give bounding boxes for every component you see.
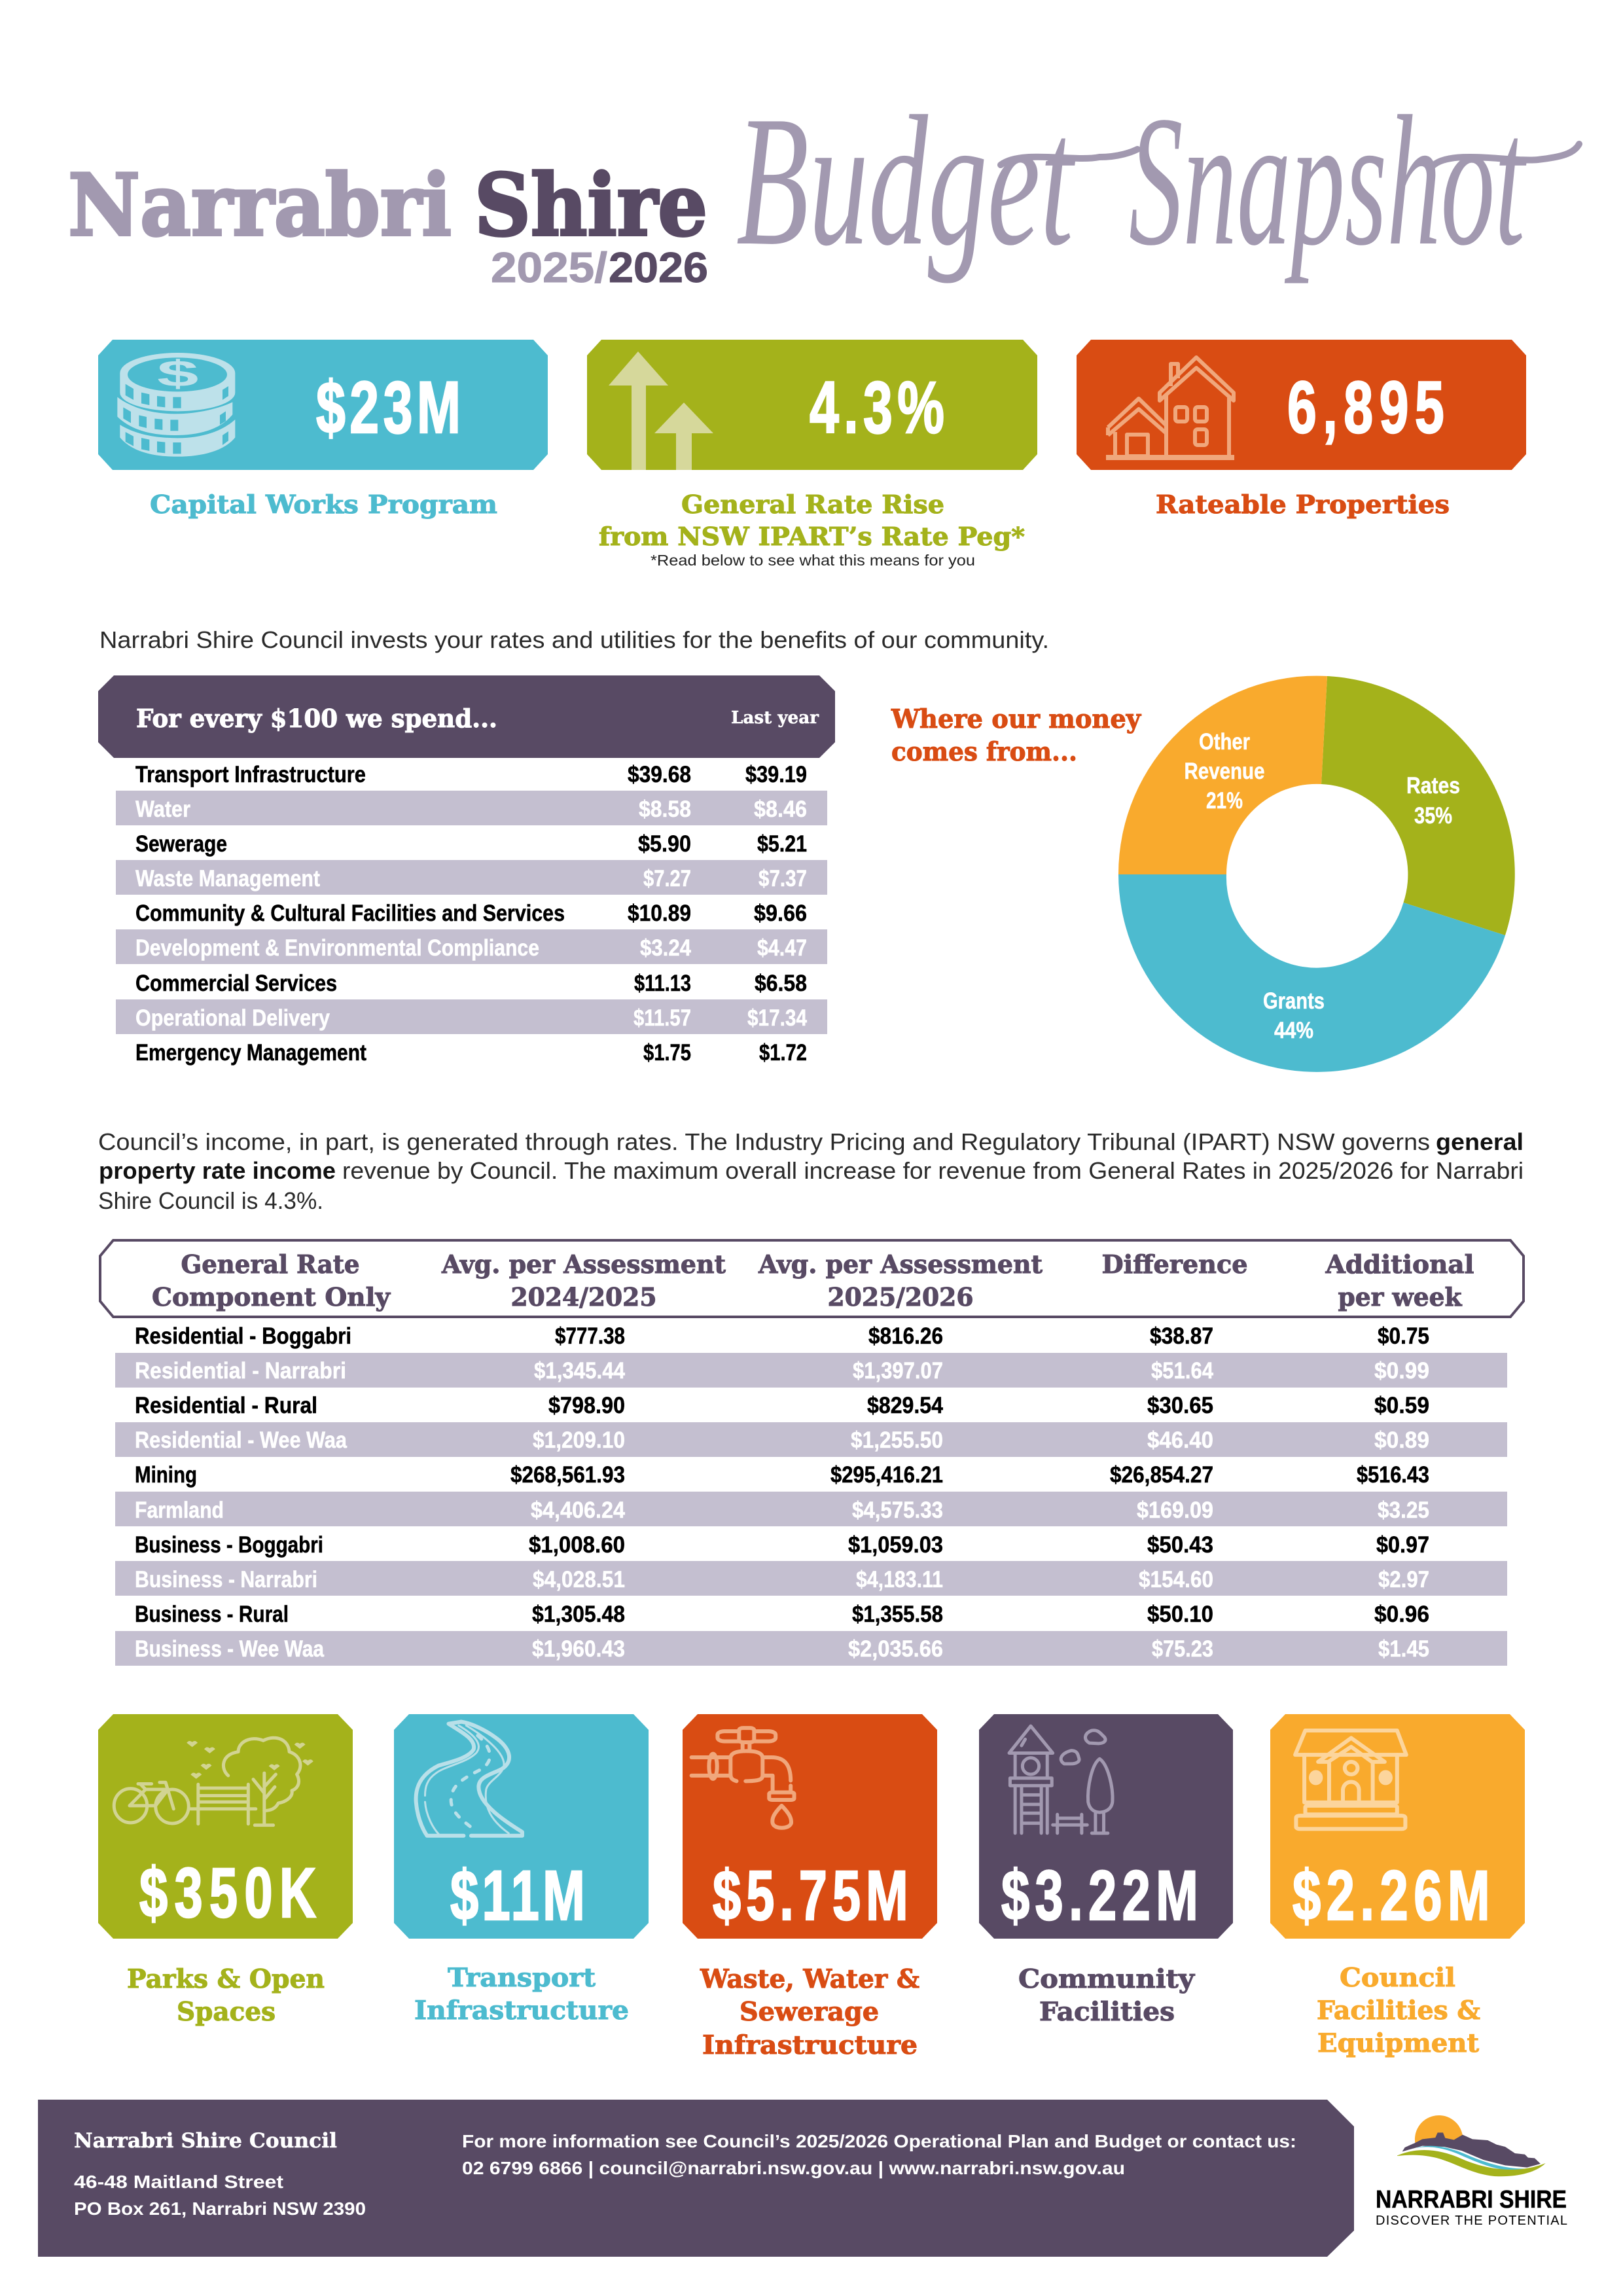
table rows: $46.40 <box>1147 1427 1213 1453</box>
table rows: $75.23 <box>1152 1636 1213 1662</box>
heading: where our money comes from: Where our money <box>891 704 1141 734</box>
panel: footer <box>38 2100 1354 2257</box>
caption: Community <box>1018 1964 1195 1994</box>
title: 2025/ <box>491 243 607 291</box>
paragraph: rates explanation: Council’s income, in part, is generated through rates. The Industry Pricing and Regulatory Tribunal (IPART) NSW governs <box>98 1128 1430 1155</box>
caption: from NSW IPART’s Rate Peg* <box>599 522 1025 551</box>
caption: Transport <box>448 1963 596 1993</box>
logo: NARRABRI SHIRE <box>1376 2186 1567 2214</box>
donut chart: Grants <box>1263 988 1325 1014</box>
title <box>68 155 708 291</box>
icon: road <box>416 1722 522 1836</box>
table rows: $30.65 <box>1147 1393 1213 1418</box>
table rows: $9.66 <box>754 901 807 926</box>
icon: park <box>114 1738 313 1825</box>
footer address <box>74 2129 366 2219</box>
paragraph: rates explanation <box>98 1128 1524 1214</box>
footer address: Narrabri Shire Council <box>74 2129 337 2153</box>
paragraph: rates explanation: general <box>1436 1128 1524 1155</box>
donut chart: Revenue <box>1185 759 1264 784</box>
table rows: $0.89 <box>1374 1427 1429 1453</box>
panel: transport <box>394 1714 649 2026</box>
table rows: $295,416.21 <box>830 1462 943 1488</box>
caption: Infrastructure <box>702 2030 918 2060</box>
table rows: $169.09 <box>1137 1498 1213 1523</box>
caption: Waste, Water & <box>700 1964 919 1994</box>
table rows: $0.75 <box>1378 1323 1429 1349</box>
table rows: $11.13 <box>634 971 691 996</box>
icon: playground <box>1009 1726 1113 1833</box>
table rows: $154.60 <box>1139 1567 1213 1592</box>
footer address: PO Box 261, Narrabri NSW 2390 <box>74 2198 366 2219</box>
table rows: $0.59 <box>1374 1393 1429 1418</box>
table rows: $1,960.43 <box>532 1636 625 1662</box>
caption: General Rate Rise <box>681 490 944 519</box>
caption <box>414 1963 629 2026</box>
table rows: Residential - Narrabri <box>135 1358 346 1384</box>
value: $23M <box>316 367 461 448</box>
table rows: $8.46 <box>754 797 807 822</box>
caption: Facilities <box>1039 1997 1175 2027</box>
table rows: $516.43 <box>1357 1462 1429 1488</box>
panel: parks <box>98 1714 353 2027</box>
table rows: $51.64 <box>1151 1358 1213 1384</box>
table header: Difference <box>1102 1249 1247 1279</box>
script title: Budget Snapshot: Budget <box>736 77 1077 284</box>
caption <box>127 1964 325 2027</box>
table rows <box>135 762 807 1066</box>
table rows: $0.97 <box>1376 1532 1429 1558</box>
table rows: $39.19 <box>745 762 807 787</box>
table rows: Transport Infrastructure <box>135 762 366 787</box>
table rows: $1,355.58 <box>852 1602 943 1627</box>
table rows: Development & Environmental Compliance <box>135 935 539 961</box>
table rows: $1,255.50 <box>851 1427 943 1453</box>
table rows: Operational Delivery <box>135 1005 330 1031</box>
table rows: $798.90 <box>548 1393 625 1418</box>
table rows: Business - Narrabri <box>135 1567 317 1592</box>
table rows: $3.25 <box>1378 1498 1429 1523</box>
table rows <box>135 1323 1429 1662</box>
donut chart: 44% <box>1274 1018 1313 1043</box>
icon: tap <box>692 1728 794 1828</box>
table rows: $7.37 <box>758 866 807 891</box>
table rows: $0.96 <box>1374 1602 1429 1627</box>
table rows: $50.10 <box>1147 1602 1213 1627</box>
icon: coins <box>117 353 235 457</box>
table header <box>100 1240 1524 1317</box>
value: $3.22M <box>1001 1856 1198 1935</box>
table rows: $1,008.60 <box>529 1532 625 1558</box>
value: $5.75M <box>713 1856 908 1935</box>
table rows: $4,028.51 <box>533 1567 625 1592</box>
caption <box>1317 1963 1480 2058</box>
table header: For every $100 we spend... <box>136 704 497 733</box>
table rows: Mining <box>135 1462 197 1488</box>
caption <box>1018 1964 1195 2027</box>
caption: Facilities & <box>1317 1996 1480 2026</box>
donut chart: 21% <box>1206 788 1243 814</box>
icon: arrows <box>609 351 713 470</box>
value: 6,895 <box>1287 367 1444 448</box>
logo: DISCOVER THE POTENTIAL <box>1376 2214 1567 2228</box>
caption: Rateable Properties <box>1156 490 1450 519</box>
table rows: $1,345.44 <box>534 1358 625 1384</box>
caption: Parks & Open <box>127 1964 325 1994</box>
caption <box>700 1964 919 2060</box>
caption: *Read below to see what this means for you <box>651 552 975 569</box>
panel: waste water sewerage <box>683 1714 937 2060</box>
title: Shire <box>474 155 707 255</box>
icon: coins: $ <box>157 353 198 395</box>
intro text: Narrabri Shire Council invests your rates and utilities for the benefits of our community. <box>99 626 1049 653</box>
table rows: Residential - Wee Waa <box>135 1427 347 1453</box>
caption: Equipment <box>1317 2028 1479 2058</box>
table rows: $1.72 <box>759 1040 807 1066</box>
table rows: $10.89 <box>628 901 691 926</box>
table rows: $3.24 <box>640 935 691 961</box>
table rows: Farmland <box>135 1498 224 1523</box>
table header: Avg. per Assessment <box>758 1249 1043 1279</box>
value: $2.26M <box>1293 1856 1490 1935</box>
table rows: $5.21 <box>757 831 807 857</box>
logo <box>1376 2115 1567 2228</box>
table rows: $4,575.33 <box>852 1498 943 1523</box>
table rows: $816.26 <box>868 1323 943 1349</box>
footer contact <box>462 2131 1296 2178</box>
footer contact: 02 6799 6866 | council@narrabri.nsw.gov.au | www.narrabri.nsw.gov.au <box>462 2158 1125 2178</box>
table rows: $39.68 <box>628 762 691 787</box>
table rows: $268,561.93 <box>510 1462 625 1488</box>
table rows: $4,406.24 <box>531 1498 625 1523</box>
table rows: $26,854.27 <box>1110 1462 1213 1488</box>
icon: building <box>1295 1731 1406 1829</box>
paragraph: rates explanation: property rate income <box>99 1157 336 1184</box>
table header: Component Only <box>152 1282 391 1312</box>
panel: community facilities <box>979 1714 1233 2027</box>
panel: rateable properties <box>1077 340 1526 519</box>
donut chart: Other <box>1199 729 1250 755</box>
caption: Infrastructure <box>414 1996 629 2026</box>
donut chart: 35% <box>1414 803 1452 829</box>
table rows: $17.34 <box>747 1005 807 1031</box>
table rows: $1,059.03 <box>848 1532 943 1558</box>
table rows: $0.99 <box>1374 1358 1429 1384</box>
value: $350K <box>139 1853 316 1932</box>
table rows: Waste Management <box>135 866 320 891</box>
donut chart <box>1118 676 1515 1072</box>
table rows: Business - Wee Waa <box>135 1636 324 1662</box>
table header: per week <box>1338 1282 1462 1312</box>
caption: Sewerage <box>740 1997 879 2027</box>
table rows: Community & Cultural Facilities and Services <box>135 901 565 926</box>
heading: where our money comes from: comes from... <box>891 737 1077 767</box>
table rows: $4.47 <box>757 935 807 961</box>
table header <box>98 675 835 758</box>
title: 2026 <box>609 243 708 291</box>
table header: Additional <box>1325 1249 1474 1279</box>
table rows: $50.43 <box>1147 1532 1213 1558</box>
table rows: Sewerage <box>135 831 227 857</box>
caption: Council <box>1340 1963 1455 1993</box>
value: $11M <box>450 1856 585 1935</box>
table rows: Residential - Boggabri <box>135 1323 351 1349</box>
paragraph: rates explanation: revenue by Council. The maximum overall increase for revenue from General Rates in 2025/2026 for Narrabri <box>342 1157 1524 1184</box>
table rows: Business - Boggabri <box>135 1532 323 1558</box>
table header: Last year <box>731 708 819 728</box>
table header: 2024/2025 <box>510 1282 657 1312</box>
table rows: $1.45 <box>1378 1636 1429 1662</box>
caption: Spaces <box>177 1997 276 2027</box>
paragraph: rates explanation: Shire Council is 4.3%. <box>98 1187 323 1214</box>
donut chart: Rates <box>1406 773 1460 798</box>
table rows: $4,183.11 <box>856 1567 943 1592</box>
table rows: $2.97 <box>1378 1567 1429 1592</box>
table rows: $1.75 <box>643 1040 691 1066</box>
table rows: $8.58 <box>639 797 691 822</box>
panel: rate table <box>100 1240 1524 1666</box>
table rows: Water <box>135 797 190 822</box>
table rows: $829.54 <box>867 1393 943 1418</box>
table rows: $1,397.07 <box>853 1358 943 1384</box>
panel: general rate rise <box>587 340 1037 569</box>
table rows: Business - Rural <box>135 1602 289 1627</box>
table rows: Emergency Management <box>135 1040 366 1066</box>
table rows: $1,305.48 <box>532 1602 625 1627</box>
table header: Avg. per Assessment <box>441 1249 726 1279</box>
footer contact: For more information see Council’s 2025/2026 Operational Plan and Budget or contact us: <box>462 2131 1296 2151</box>
table rows: $777.38 <box>555 1323 625 1349</box>
table rows: $6.58 <box>755 971 807 996</box>
table rows: Residential - Rural <box>135 1393 317 1418</box>
table rows: $7.27 <box>643 866 691 891</box>
panel: council facilities <box>1270 1714 1525 2058</box>
title: Narrabri <box>68 155 452 255</box>
table rows: $2,035.66 <box>848 1636 943 1662</box>
heading: where our money comes from <box>891 704 1141 767</box>
table rows: $5.90 <box>638 831 691 857</box>
value: 4.3% <box>810 367 944 448</box>
panel: spending table <box>98 675 835 1066</box>
table header: 2025/2026 <box>827 1282 974 1312</box>
table rows: $1,209.10 <box>533 1427 625 1453</box>
table header: General Rate <box>181 1249 360 1279</box>
footer address: 46-48 Maitland Street <box>74 2172 283 2192</box>
panel: capital works <box>98 340 548 519</box>
caption: Capital Works Program <box>150 490 497 519</box>
table rows: $11.57 <box>633 1005 691 1031</box>
caption <box>599 490 1025 569</box>
table rows: $38.87 <box>1150 1323 1213 1349</box>
icon: houses <box>1106 357 1234 457</box>
script title: Budget Snapshot <box>736 77 1579 284</box>
table rows: Commercial Services <box>135 971 337 996</box>
